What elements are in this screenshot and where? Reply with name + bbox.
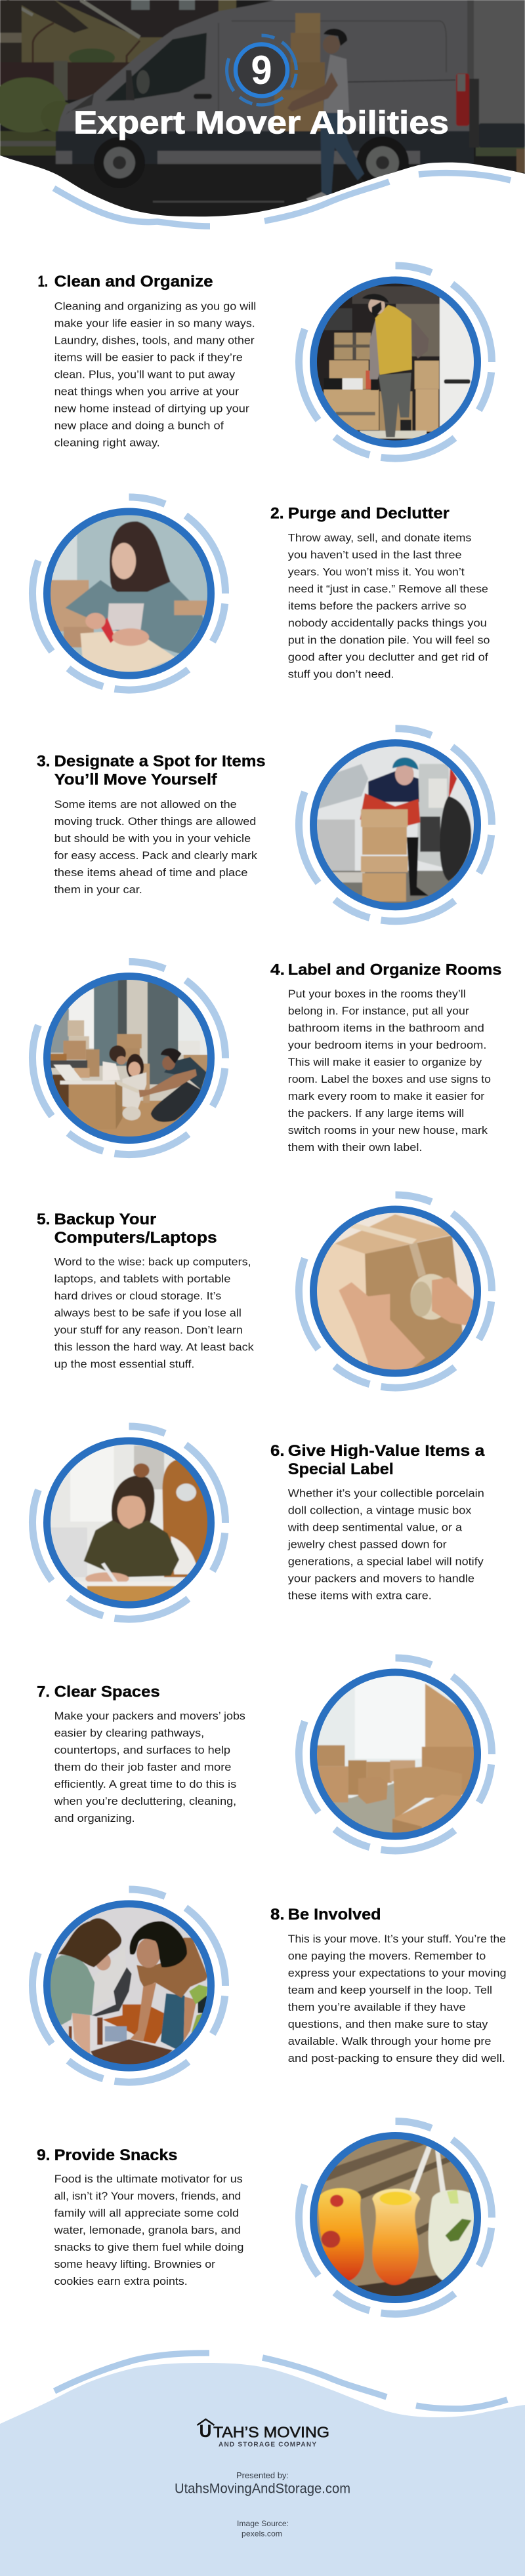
step 4 heading: Label and Organize Rooms xyxy=(288,961,501,979)
footer: wave accent strokes xyxy=(54,2353,507,2409)
panel: step 2 xyxy=(33,497,490,690)
step 8 heading: 8. xyxy=(270,1906,285,1923)
step 9 text xyxy=(53,2173,243,2287)
step 1 text: make your life easier in so many ways. xyxy=(54,317,255,329)
image source: pexels.com xyxy=(242,2529,282,2539)
logo icon: house roof over U xyxy=(197,2419,214,2425)
panel: step 7 xyxy=(37,1658,492,1851)
panel: step 8 xyxy=(33,1889,507,2082)
image source xyxy=(237,2519,289,2539)
step 2 heading: Purge and Declutter xyxy=(288,505,450,523)
step 6 text: jewelry chest passed down for xyxy=(287,1539,447,1551)
step 9 text: Food is the ultimate motivator for us xyxy=(54,2173,243,2185)
step 9 heading: Provide Snacks xyxy=(54,2146,177,2164)
step 2 text: good after you declutter and get rid of xyxy=(288,652,488,664)
step 4 text xyxy=(288,988,491,1154)
step 1 text: clean. Plus, you’ll want to put away xyxy=(54,369,236,380)
step 6 text xyxy=(287,1488,484,1602)
step 9 text: water, lemonade, granola bars, and xyxy=(53,2224,241,2236)
step 5 text: laptops, and tablets with portable xyxy=(54,1274,230,1285)
header: photo banner xyxy=(0,0,525,223)
step 5 heading: Computers/Laptops xyxy=(54,1229,217,1247)
step 2 text: need it “just in case.” Remove all these xyxy=(288,584,488,595)
step 4 text: them with their own label. xyxy=(288,1142,422,1154)
step 5 text: your stuff for any reason. Don’t learn xyxy=(54,1325,243,1337)
image source: Image Source: xyxy=(237,2519,289,2528)
step 9 heading: 9. xyxy=(37,2146,50,2164)
step 9 text: some heavy lifting. Brownies or xyxy=(54,2259,216,2270)
step 7 text: easier by clearing pathways, xyxy=(54,1727,204,1739)
step 3 text: these items ahead of time and place xyxy=(54,867,247,879)
step 3 heading xyxy=(37,752,266,789)
step 8 text: one paying the movers. Remember to xyxy=(288,1950,486,1962)
step 8 text: available. Walk through your home pre xyxy=(288,2036,491,2047)
website: UtahsMovingAndStorage.com xyxy=(175,2482,350,2497)
step 9 text: snacks to give them fuel while doing xyxy=(54,2242,243,2253)
step 7 text: and organizing. xyxy=(54,1813,135,1824)
step 6 text: with deep sentimental value, or a xyxy=(287,1522,463,1534)
step 7 text: them do their job faster and more xyxy=(54,1761,231,1773)
step 5 heading: Backup Your xyxy=(54,1211,156,1228)
step 3 heading: 3. xyxy=(37,752,50,770)
step 2 text: nobody accidentally packs things you xyxy=(288,618,487,630)
step 3 text: but should be with you in your vehicle xyxy=(54,833,251,845)
header: number 9 badge: 9 xyxy=(251,48,272,93)
presented by label: Presented by: xyxy=(236,2470,289,2480)
header: wave accent strokes xyxy=(54,173,511,226)
step 6 text: Whether it’s your collectible porcelain xyxy=(288,1488,484,1500)
step 4 text: your bedroom items in your bedroom. xyxy=(288,1039,486,1051)
step 4 text: belong in. For instance, put all your xyxy=(288,1005,469,1017)
footer background wave xyxy=(0,2363,525,2576)
step 7 text: efficiently. A great time to do this is xyxy=(54,1779,236,1790)
step 7 text: countertops, and surfaces to help xyxy=(54,1744,230,1756)
step 8 text: and post-packing to ensure they did well. xyxy=(288,2053,505,2064)
step 2 photo: woman taping a box xyxy=(33,497,228,690)
panel: step 5 xyxy=(37,1195,492,1388)
step 1 text: neat things when you arrive at your xyxy=(54,386,240,397)
step 1 text xyxy=(54,300,256,449)
step 5 text: hard drives or cloud storage. It’s xyxy=(54,1291,221,1302)
step 4 text: mark every room to make it easier for xyxy=(288,1091,485,1102)
step 6 text: generations, a special label will notify xyxy=(288,1556,484,1568)
step 6 text: these items with extra care. xyxy=(288,1590,432,1602)
panel: step 3 xyxy=(37,729,492,921)
step 7 text xyxy=(54,1710,245,1824)
step 1 text: items will be easier to pack if they’re xyxy=(54,352,243,363)
step 4 photo: family with boxes xyxy=(33,961,226,1155)
step 3 text xyxy=(54,799,258,896)
step 6 heading: 6. xyxy=(270,1442,285,1460)
step 8 heading: Be Involved xyxy=(288,1906,381,1923)
step 2 text: items before the packers arrive so xyxy=(288,601,467,613)
step 9 photo: three cold drinks xyxy=(299,2121,492,2314)
step 3 text: moving truck. Other things are allowed xyxy=(54,816,256,828)
step 8 text: them you’re available if they have xyxy=(288,2002,466,2013)
step 6 text: doll collection, a vintage music box xyxy=(288,1505,472,1517)
panel: step 9 xyxy=(37,2121,492,2314)
step 1 text: new home instead of dirtying up your xyxy=(54,403,250,414)
step 2 text: put in the donation pile. You will feel so xyxy=(288,635,490,647)
panel: step 6 xyxy=(33,1426,485,1619)
step 2 text: Throw away, sell, and donate items xyxy=(288,533,471,544)
step 4 heading: 4. xyxy=(270,961,285,979)
step 6 heading: Special Label xyxy=(288,1460,394,1478)
logo: TAH’S MOVING xyxy=(213,2424,329,2441)
step 7 heading: 7. xyxy=(37,1683,50,1701)
step 4 text: the packers. If any large items will xyxy=(288,1108,464,1119)
step 6 heading: Give High-Value Items a xyxy=(288,1442,485,1460)
step 1 heading: Clean and Organize xyxy=(54,273,213,291)
step 1 text: Laundry, dishes, tools, and many other xyxy=(54,334,255,346)
step 8 text: express your expectations to your moving xyxy=(288,1967,507,1979)
step 7 text: when you’re decluttering, cleaning, xyxy=(54,1796,236,1807)
panel: step 4 xyxy=(33,961,501,1155)
logo xyxy=(197,2419,329,2449)
step 5 text: always best to be safe if you lose all xyxy=(54,1308,242,1319)
step 3 heading: You’ll Move Yourself xyxy=(54,771,218,789)
step 8 photo: two people moving a table xyxy=(33,1889,226,2082)
step 9 text: cookies earn extra points. xyxy=(54,2276,188,2287)
header: number 9 badge xyxy=(227,35,296,105)
step 6 heading xyxy=(270,1442,485,1478)
step 4 text: switch rooms in your new house, mark xyxy=(288,1125,488,1137)
step 5 text xyxy=(54,1257,255,1371)
step 3 heading: Designate a Spot for Items xyxy=(54,752,266,770)
panel: step 1 xyxy=(38,266,492,458)
step 6 photo: woman labeling a box xyxy=(33,1426,228,1619)
step 1 photo: mover loading van xyxy=(299,266,492,458)
title: Expert Mover Abilities xyxy=(74,105,449,140)
step 3 text: them in your car. xyxy=(54,884,142,896)
step 9 text: all, isn’t it? Your movers, friends, and xyxy=(54,2190,241,2202)
step 1 heading: 1. xyxy=(38,273,48,291)
step 2 text: years. You won’t miss it. You won’t xyxy=(288,567,465,578)
step 7 heading: Clear Spaces xyxy=(54,1683,160,1701)
step 3 text: Some items are not allowed on the xyxy=(54,799,237,811)
step 6 text: your packers and movers to handle xyxy=(288,1573,474,1585)
step 3 photo: man lifting boxes xyxy=(299,729,492,921)
step 2 text xyxy=(288,533,490,681)
step 5 photo: hands taping a box xyxy=(299,1195,492,1388)
step 5 heading: 5. xyxy=(37,1211,50,1228)
step 5 text: Word to the wise: back up computers, xyxy=(54,1257,251,1268)
step 8 text xyxy=(288,1933,507,2064)
step 8 text: questions, and then make sure to stay xyxy=(288,2019,488,2030)
step 7 photo: room of cardboard boxes xyxy=(299,1658,492,1851)
step 7 text: Make your packers and movers’ jobs xyxy=(54,1710,245,1722)
step 4 text: bathroom items in the bathroom and xyxy=(288,1022,484,1034)
step 9 text: family will all appreciate some cold xyxy=(54,2207,239,2219)
step 4 text: room. Label the boxes and use signs to xyxy=(288,1074,491,1085)
step 2 text: stuff you don’t need. xyxy=(288,669,394,681)
step 2 text: you haven’t used in the last three xyxy=(288,550,462,561)
step 8 text: This is your move. It’s your stuff. You’re the xyxy=(288,1933,506,1945)
logo: U xyxy=(200,2421,211,2441)
step 1 text: cleaning right away. xyxy=(54,437,160,449)
step 3 text: for easy access. Pack and clearly mark xyxy=(54,850,258,862)
step 4 text: Put your boxes in the rooms they’ll xyxy=(288,988,466,1000)
logo: AND STORAGE COMPANY xyxy=(219,2442,316,2449)
step 8 text: team and keep yourself in the loop. Tell xyxy=(288,1984,492,1996)
step 2 heading: 2. xyxy=(270,505,284,523)
step 5 text: up the most essential stuff. xyxy=(54,1359,194,1371)
step 1 text: new place and doing a bunch of xyxy=(54,420,224,432)
step 5 text: this lesson the hard way. At least back xyxy=(54,1342,255,1354)
step 1 text: Cleaning and organizing as you go will xyxy=(54,300,256,312)
step 4 text: This will make it easier to organize by xyxy=(288,1057,482,1068)
step 5 heading xyxy=(37,1211,217,1247)
